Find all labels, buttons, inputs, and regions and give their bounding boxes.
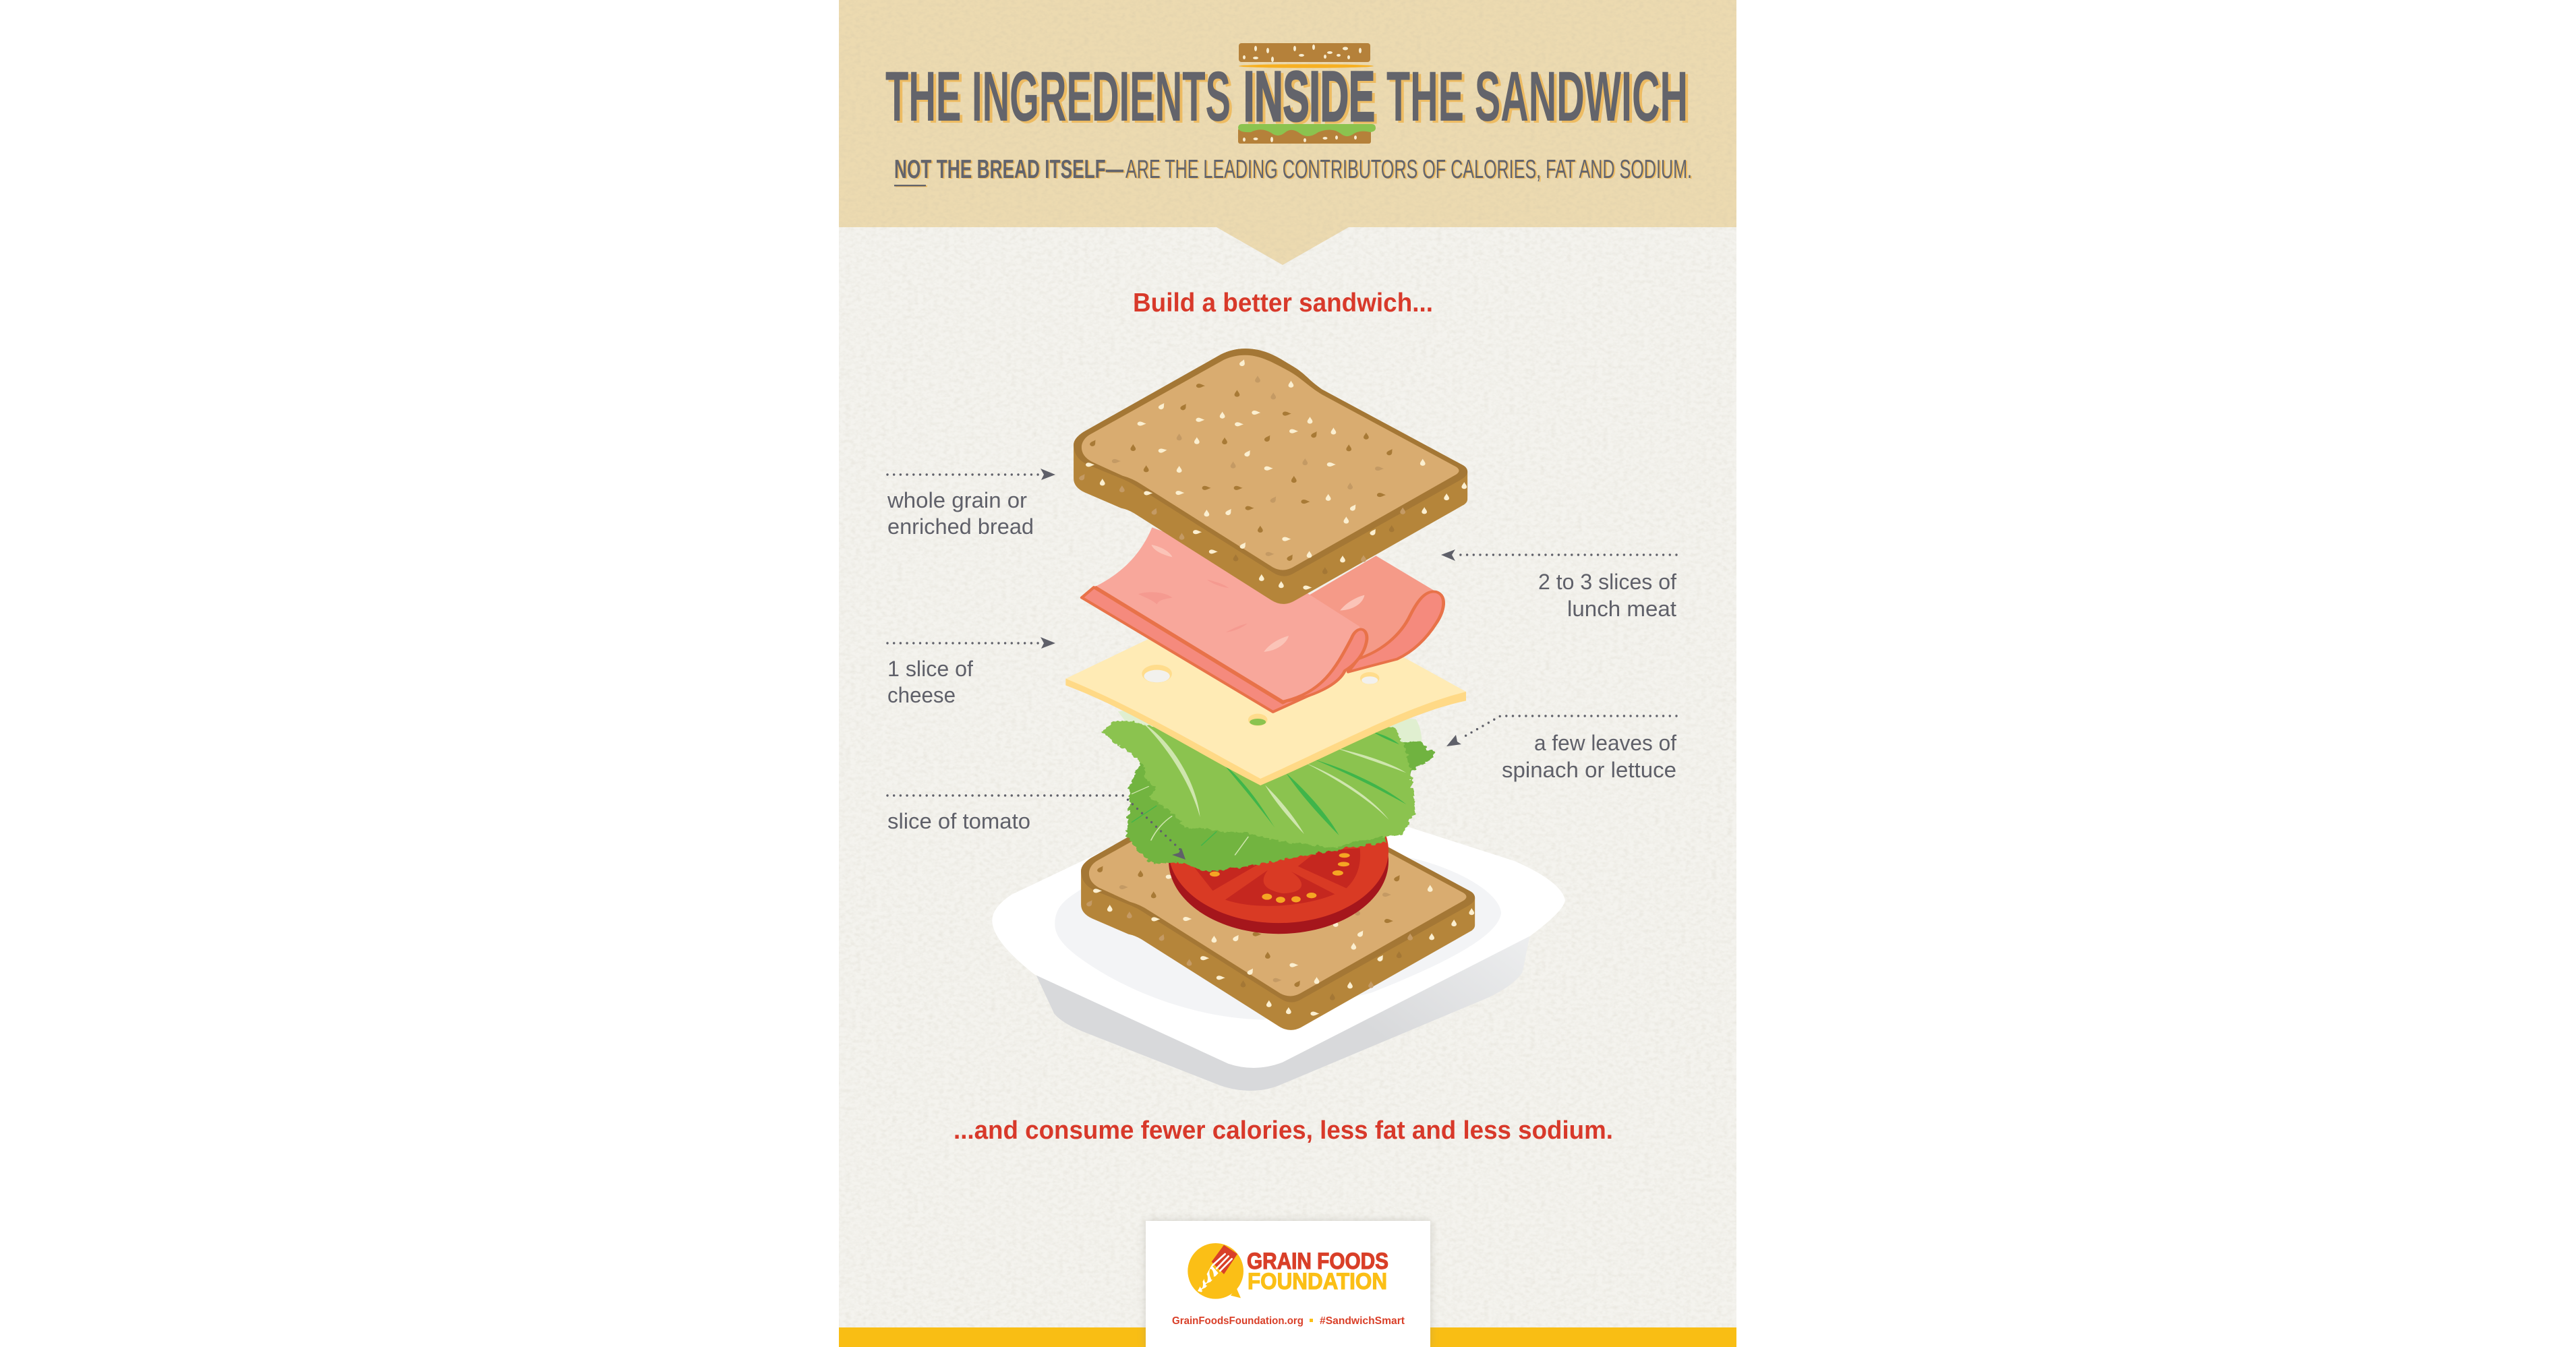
front slice underside — [1082, 587, 1345, 712]
website and hashtag: GrainFoodsFoundation.org — [1172, 1315, 1304, 1327]
tomato face — [1169, 779, 1388, 923]
cheese face — [1065, 582, 1466, 779]
cheese holes — [1142, 665, 1380, 726]
poster panel background — [839, 0, 1736, 1347]
label: 2 to 3 slices of lunch meat — [1441, 549, 1676, 621]
footer logo card: FOUNDATION — [1248, 1269, 1387, 1294]
label: 2 to 3 slices of lunch meat: 2 to 3 slices of — [1538, 570, 1676, 594]
label: whole grain or enriched bread — [887, 469, 1055, 539]
label: 1 slice of cheese: cheese — [887, 683, 956, 707]
arrow — [1446, 735, 1461, 746]
logo wordmark: GRAIN FOODS — [1247, 1249, 1388, 1274]
arrow — [1041, 637, 1055, 649]
tomato seeds — [1210, 853, 1350, 903]
lunch meat — [1082, 527, 1444, 712]
label: 1 slice of cheese — [887, 637, 1055, 707]
tomato skin — [1169, 788, 1388, 934]
back slice — [1306, 556, 1436, 659]
top bread slice — [1074, 349, 1467, 604]
tomato slice — [1169, 779, 1388, 934]
label: a few leaves of spinach or lettuce: spinach or lettuce — [1502, 758, 1676, 782]
bottom bread slice — [1081, 775, 1475, 1030]
main light leaf — [1103, 721, 1415, 848]
title part: inside: INSIDE — [1243, 57, 1375, 136]
header band with pointer — [839, 0, 1736, 265]
label: slice of tomato: slice of tomato — [887, 809, 1030, 833]
footer logo card — [1146, 1221, 1430, 1347]
front slice top — [1095, 527, 1359, 702]
back slice curl — [1348, 592, 1444, 672]
label: 1 slice of cheese: 1 slice of — [887, 657, 973, 681]
subtitle — [894, 155, 1692, 186]
dark lower leaf — [1127, 762, 1391, 872]
icon: top bun over the word inside — [1239, 43, 1374, 68]
front slice curl — [1283, 629, 1367, 702]
arrow — [1441, 549, 1455, 561]
label: 2 to 3 slices of lunch meat: lunch meat — [1567, 597, 1676, 621]
subtitle regular part: ARE THE LEADING CONTRIBUTORS OF CALORIES, FAT AND SODIUM. — [1125, 155, 1692, 184]
cheese slice — [1065, 582, 1466, 785]
plate top — [992, 779, 1565, 1068]
lettuce — [1103, 709, 1436, 872]
pale back leaf — [1118, 709, 1422, 745]
subtitle bold part: NOT THE BREAD ITSELF— — [894, 155, 1123, 184]
label: a few leaves of spinach or lettuce: a few leaves of — [1534, 731, 1676, 755]
closing message: ...and consume fewer calories, less fat and less sodium. — [954, 1116, 1613, 1145]
plate — [992, 779, 1565, 1091]
footer yellow bar — [839, 1327, 1736, 1347]
heading: build a better sandwich: Build a better sandwich... — [1133, 289, 1433, 318]
label: whole grain or enriched bread: whole grain or — [887, 488, 1027, 512]
label: a few leaves of spinach or lettuce — [1446, 716, 1676, 782]
plate underside shadow — [1034, 933, 1530, 1091]
footer logo card: #SandwichSmart — [1320, 1315, 1405, 1327]
icon: bottom bun with lettuce under the word inside — [1238, 124, 1376, 144]
logo mark — [1188, 1243, 1243, 1299]
label: whole grain or enriched bread: enriched bread — [887, 514, 1034, 539]
plate well — [1055, 830, 1501, 1020]
arrow — [1172, 848, 1185, 860]
title — [885, 57, 1688, 136]
arrow — [1041, 469, 1055, 480]
cheese edge — [1065, 679, 1466, 785]
tomato flesh chambers — [1194, 848, 1360, 906]
title part: the ingredients: THE INGREDIENTS — [885, 57, 1231, 136]
title part: the sandwich: THE SANDWICH — [1386, 57, 1688, 136]
meat marbling — [1138, 545, 1364, 652]
label: slice of tomato — [887, 796, 1185, 860]
dark right leaf — [1401, 741, 1436, 775]
underline under not — [894, 185, 926, 186]
lettuce veins — [1132, 723, 1406, 855]
